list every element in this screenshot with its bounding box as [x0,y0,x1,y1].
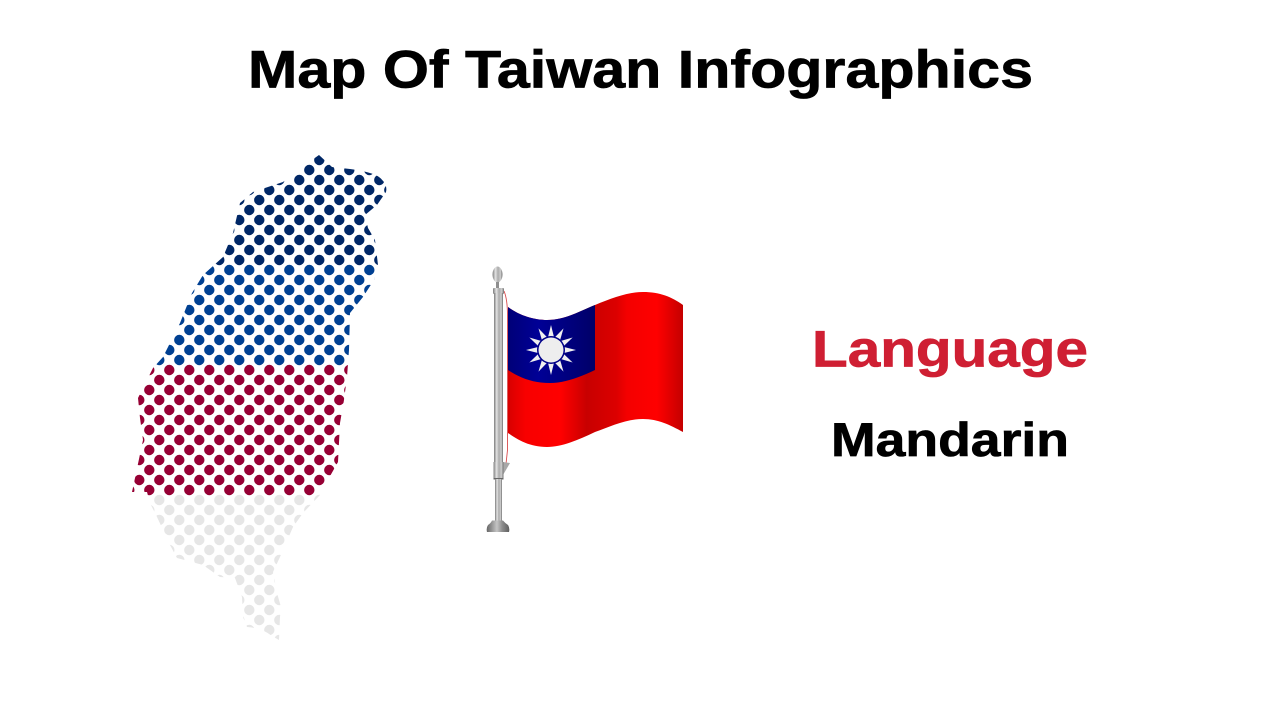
icon: Taiwan flag on pole [487,266,683,532]
flag blue canton [508,305,595,383]
halftone map of Taiwan [132,155,386,640]
flag sun emblem [526,325,576,375]
map band: grey south [151,494,320,640]
map band: crimson [132,364,348,496]
map band: blue [156,264,375,366]
text: Mandarin: Mandarin [831,413,1069,466]
map band: navy north [216,155,386,266]
flag rope [504,291,508,464]
heading: Language: Language [812,321,1088,378]
flag red field [508,292,683,447]
flagpole [487,266,510,532]
title: Map Of Taiwan Infographics [248,40,1033,100]
